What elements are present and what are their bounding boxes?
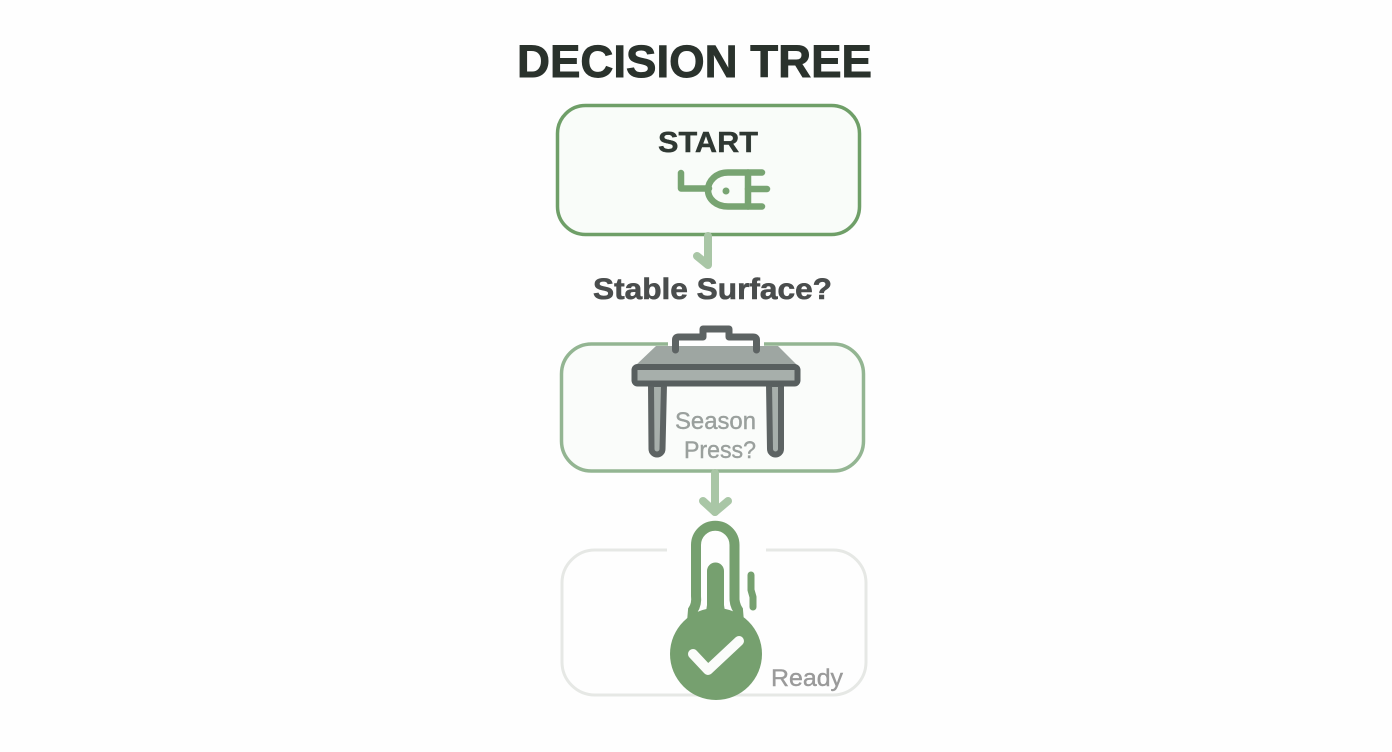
title: DECISION TREE bbox=[517, 36, 872, 87]
season press label: Season bbox=[675, 408, 756, 435]
arrow: season press to ready bbox=[703, 473, 728, 512]
panel: season press bbox=[562, 325, 864, 471]
ready label: Ready bbox=[771, 665, 843, 692]
icon: thermometer with check bbox=[670, 526, 762, 700]
start label: START bbox=[658, 127, 758, 159]
question: stable surface: Stable Surface? bbox=[593, 273, 832, 306]
season press label bbox=[675, 408, 756, 464]
arrow: start to stable surface bbox=[697, 236, 708, 265]
panel: ready bbox=[562, 526, 866, 700]
season press label: Press? bbox=[684, 437, 756, 464]
panel: start bbox=[558, 106, 860, 234]
icon: table bbox=[634, 325, 798, 455]
icon: plug bbox=[681, 172, 767, 206]
